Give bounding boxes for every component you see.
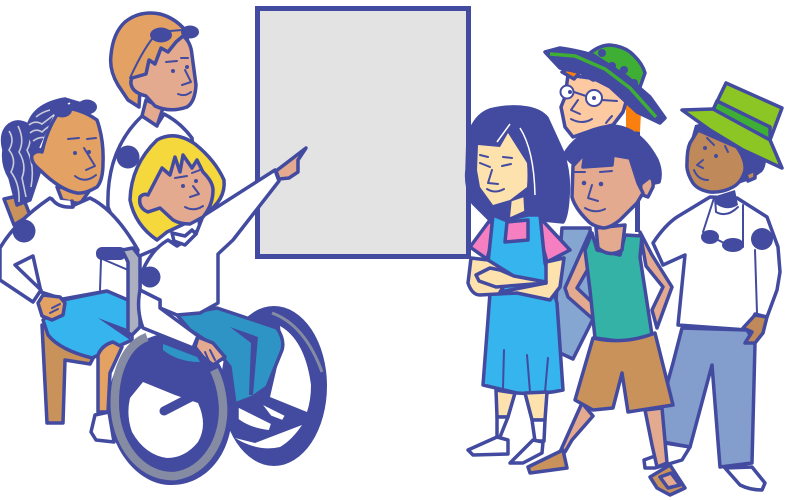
person: girl with long dark hair in blue dress xyxy=(467,107,570,463)
wheelchair: back wheel xyxy=(221,306,327,466)
chair xyxy=(4,195,100,423)
wheelchair girl: forearm and hand xyxy=(139,290,225,365)
person: standing boy with orange hair xyxy=(108,13,200,260)
person: boy in teal tank top and tan shorts xyxy=(528,126,685,495)
backpack shape xyxy=(556,228,595,359)
person: woman in green hat with glasses xyxy=(545,45,665,232)
person: man in lime green hat xyxy=(644,83,782,490)
wheelchair: front wheel xyxy=(108,333,232,485)
person: girl in wheelchair with yellow hair xyxy=(130,136,306,432)
person: seated girl with wavy hair xyxy=(0,99,138,442)
presentation board xyxy=(258,8,468,256)
wheelchair: handle xyxy=(96,247,140,335)
